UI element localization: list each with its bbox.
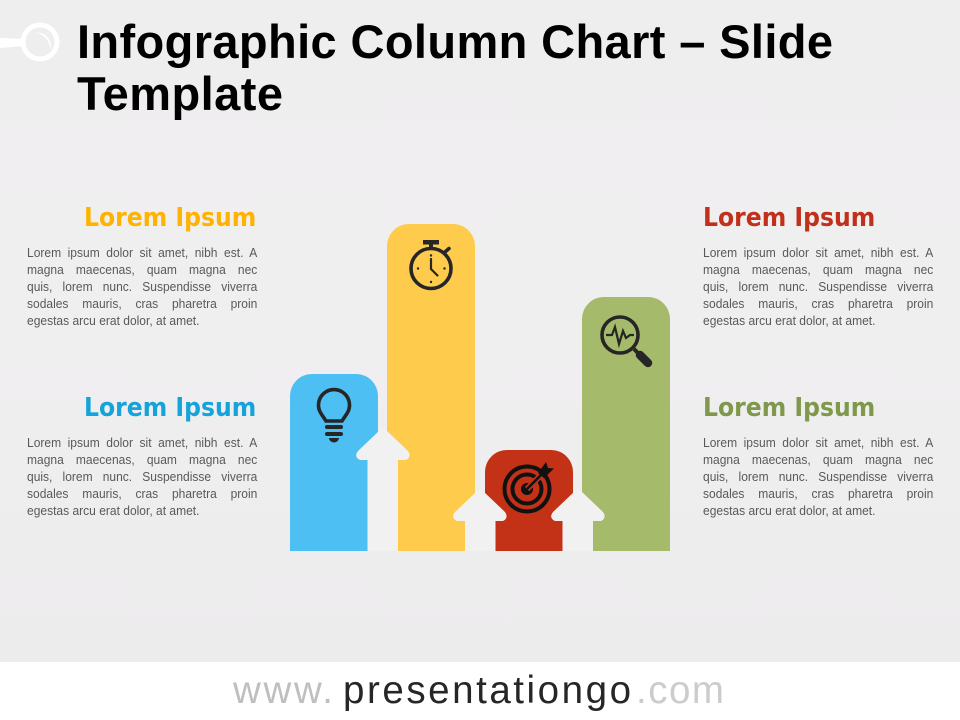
- logo mark: [0, 25, 57, 59]
- text block: bottom left: quis, lorem nunc. Suspendisse viverra: [27, 469, 257, 484]
- footer url: .com: [636, 669, 724, 712]
- text block: bottom left: sodales mauris, cras pharetra proin: [27, 486, 257, 501]
- text block: bottom left: Lorem ipsum dolor sit amet, nibh est. A: [27, 435, 257, 450]
- icon: stopwatch: [411, 240, 451, 288]
- text block: top left: egestas arcu erat dolor, at amet.: [27, 313, 199, 328]
- column: green: [582, 297, 670, 551]
- text block: bottom left: egestas arcu erat dolor, at amet.: [27, 503, 199, 518]
- column chart: [290, 224, 670, 551]
- text block: bottom right: Lorem ipsum dolor sit amet, nibh est. A: [703, 435, 933, 450]
- text block: bottom right: quis, lorem nunc. Suspendisse viverra: [703, 469, 933, 484]
- column: red: [485, 450, 573, 551]
- text block: top right: [703, 245, 934, 328]
- footer url: presentationgo: [343, 669, 631, 712]
- icon: target: [504, 462, 554, 512]
- text block: bottom right: sodales mauris, cras pharetra proin: [703, 486, 933, 501]
- footer url: [0, 662, 960, 720]
- text block: top right: Lorem ipsum dolor sit amet, nibh est. A: [703, 245, 933, 260]
- text block: top left: magna maecenas, quam magna nec: [27, 262, 257, 277]
- text block: bottom right: magna maecenas, quam magna nec: [703, 452, 933, 467]
- text block: top left: quis, lorem nunc. Suspendisse viverra: [27, 279, 257, 294]
- footer url: www.: [232, 669, 333, 712]
- text block: top left: Lorem ipsum dolor sit amet, nibh est. A: [27, 245, 257, 260]
- heading: top left: Lorem Ipsum: [84, 203, 256, 233]
- text block: top right: quis, lorem nunc. Suspendisse viverra: [703, 279, 933, 294]
- title: [77, 15, 833, 120]
- text block: top left: [27, 245, 258, 328]
- arrow: first: [356, 429, 410, 551]
- icon: magnifier: [602, 317, 648, 363]
- text block: bottom left: [27, 435, 258, 518]
- heading: top right: Lorem Ipsum: [703, 203, 875, 233]
- column: blue: [290, 374, 378, 551]
- heading: bottom left: Lorem Ipsum: [84, 393, 256, 423]
- text block: top right: egestas arcu erat dolor, at amet.: [703, 313, 875, 328]
- arrow: third: [551, 490, 605, 551]
- arrow: second: [453, 490, 507, 551]
- text block: top right: sodales mauris, cras pharetra proin: [703, 296, 933, 311]
- text block: bottom right: [703, 435, 934, 518]
- column: yellow: [387, 224, 475, 551]
- title: Template: [77, 67, 283, 120]
- text block: top right: magna maecenas, quam magna nec: [703, 262, 933, 277]
- heading: bottom right: Lorem Ipsum: [703, 393, 875, 423]
- text block: bottom right: egestas arcu erat dolor, at amet.: [703, 503, 875, 518]
- text block: bottom left: magna maecenas, quam magna nec: [27, 452, 257, 467]
- icon: light bulb: [318, 390, 350, 442]
- title: Infographic Column Chart – Slide: [77, 15, 833, 68]
- text block: top left: sodales mauris, cras pharetra proin: [27, 296, 257, 311]
